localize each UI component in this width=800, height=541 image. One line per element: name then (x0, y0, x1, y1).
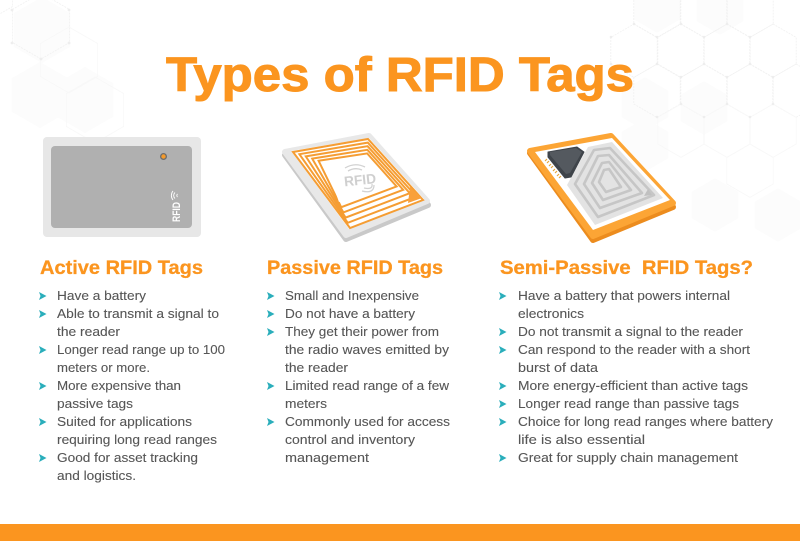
bullet: suited for applications: Suited for applications (57, 415, 192, 429)
bullet: access control: Commonly used for access (285, 415, 450, 429)
RFID mark: RFID (343, 170, 377, 189)
illustration: semi-passive RFID tag (530, 136, 673, 240)
bullet: energy-efficient: More energy-efficient than active tags (518, 379, 748, 393)
bullet: access control (267, 415, 450, 465)
bullet: more expensive (39, 379, 181, 411)
bullet: battery powers electronics: Have a battery that powers internal (518, 289, 730, 303)
bullet: long ranges and battery life: life is also essential (518, 433, 645, 447)
bullet: no battery: Do not have a battery (285, 307, 416, 321)
bullet: able to transmit (39, 307, 219, 339)
bullet: longer range: Longer read range than passive tags (518, 397, 739, 411)
bullet: able to transmit: the reader (57, 325, 120, 339)
background hexagon pattern, top left (0, 0, 124, 143)
bullet: short burst: burst of data (518, 361, 598, 375)
bullet: limited read range: meters (285, 397, 327, 411)
bullet: suited for applications: requiring long read ranges (57, 433, 217, 447)
bullet: more expensive: More expensive than (57, 379, 181, 393)
bullet: have a battery: Have a battery (57, 289, 147, 303)
bullet: asset tracking: and logistics. (57, 469, 136, 483)
icon: RFID mark: RFID (171, 202, 183, 222)
icon: chip (545, 147, 584, 178)
heading: passive: Passive RFID Tags (267, 257, 443, 279)
panel: passive RFID tags (267, 257, 450, 465)
footer bar (0, 524, 800, 541)
bullet: small and inexpensive: Small and Inexpensive (285, 289, 419, 303)
illustration: active RFID tag (43, 137, 201, 237)
bullet: asset tracking (39, 451, 198, 483)
icon: LED (160, 153, 167, 160)
background hexagon pattern, top right (610, 0, 800, 242)
bullet: long ranges and battery life (499, 415, 774, 447)
bullet: battery powers electronics (499, 289, 730, 321)
bullet: long ranges and battery life: Choice for long read ranges where battery (518, 415, 774, 429)
antenna coil (293, 139, 423, 228)
bullet: more expensive: passive tags (57, 397, 133, 411)
panel: active RFID tags (39, 257, 225, 483)
bullet: access control: management (285, 451, 370, 465)
title: Types of RFID Tags (166, 49, 634, 102)
antenna panel (567, 142, 663, 225)
bullet: supply chain: Great for supply chain management (518, 451, 739, 465)
bullet: power from radio waves: the reader (285, 361, 348, 375)
bullet: power from radio waves: the radio waves emitted by (285, 343, 450, 357)
bullet: no signal: Do not transmit a signal to the reader (518, 325, 743, 339)
bullet: longer read range: Longer read range up to 100 (57, 343, 225, 357)
bullet: longer read range (39, 343, 225, 375)
panel: semi-passive RFID tags (499, 257, 774, 465)
bullet: limited read range (267, 379, 450, 411)
illustration: passive RFID tag (285, 136, 428, 239)
heading: active: Active RFID Tags (40, 257, 203, 279)
bullet: short burst: Can respond to the reader with a short (518, 343, 751, 357)
bullet: able to transmit: Able to transmit a signal to (57, 307, 219, 321)
bullet: access control: control and inventory (285, 433, 416, 447)
bullet: limited read range: Limited read range of a few (285, 379, 450, 393)
bullet: suited for applications (39, 415, 217, 447)
bullet: power from radio waves: They get their power from (285, 325, 439, 339)
bullet: short burst (499, 343, 751, 375)
bullet: longer read range: meters or more. (57, 361, 150, 375)
bullet: asset tracking: Good for asset tracking (57, 451, 198, 465)
heading: semi-passive: Semi-Passive RFID Tags? (500, 257, 753, 279)
bullet: battery powers electronics: electronics (518, 307, 584, 321)
bullet: power from radio waves (267, 325, 450, 375)
